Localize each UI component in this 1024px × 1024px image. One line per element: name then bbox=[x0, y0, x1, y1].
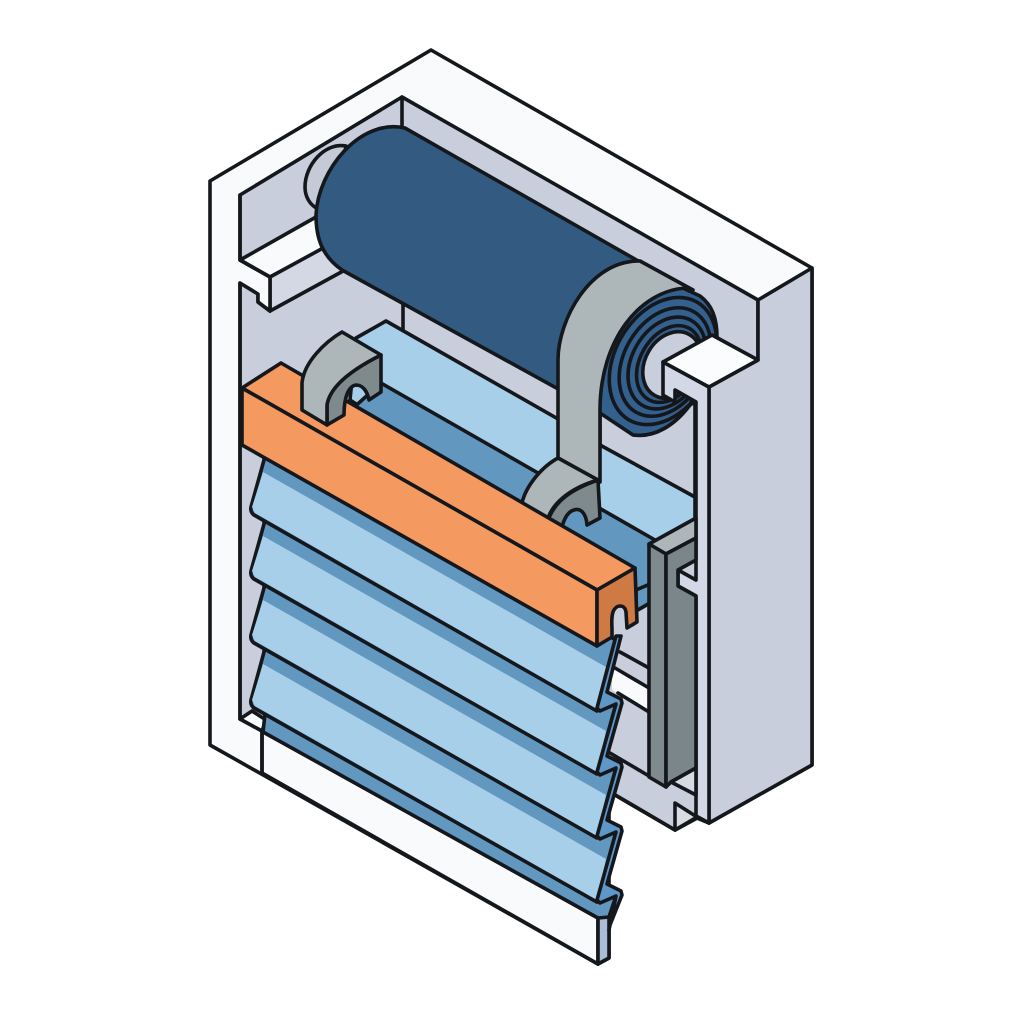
channel guide rail bbox=[649, 518, 696, 795]
bottom notch bbox=[675, 803, 697, 830]
blind panel 2 bbox=[251, 502, 616, 774]
blind panel 4 bbox=[251, 630, 616, 902]
illustration: roller blind cassette cutaway bbox=[208, 48, 814, 966]
front strip beside roll bbox=[663, 362, 709, 823]
top white lug bbox=[663, 335, 758, 387]
left upper ledge bbox=[238, 195, 345, 719]
pleated zigzag blind edge bbox=[597, 636, 622, 930]
rear wall stripes bbox=[610, 652, 675, 830]
fabric roll end bbox=[602, 290, 719, 434]
blue sliver behind bar bbox=[636, 584, 650, 611]
strap over roll bbox=[558, 261, 693, 482]
roller cylinder bbox=[316, 127, 640, 412]
axle knob bbox=[305, 146, 346, 209]
dark blue shade under panel bbox=[340, 383, 655, 600]
blind panel 3 bbox=[251, 566, 616, 838]
left bottom corner piece bbox=[240, 711, 266, 731]
wall below roll bbox=[600, 402, 695, 497]
left hanger hook bbox=[302, 332, 381, 425]
orange head bar bbox=[242, 363, 637, 646]
light blue blind upper panel bbox=[340, 321, 695, 600]
blind panel 1 bbox=[251, 440, 616, 711]
back wall interior bbox=[240, 97, 758, 830]
bottom dark blind strip bbox=[263, 714, 616, 918]
right side face bbox=[709, 268, 812, 823]
bottom sill rail bbox=[262, 731, 609, 964]
housing silhouette bbox=[210, 50, 812, 964]
right hanger hook bbox=[521, 458, 600, 548]
wall seam bbox=[402, 97, 403, 330]
